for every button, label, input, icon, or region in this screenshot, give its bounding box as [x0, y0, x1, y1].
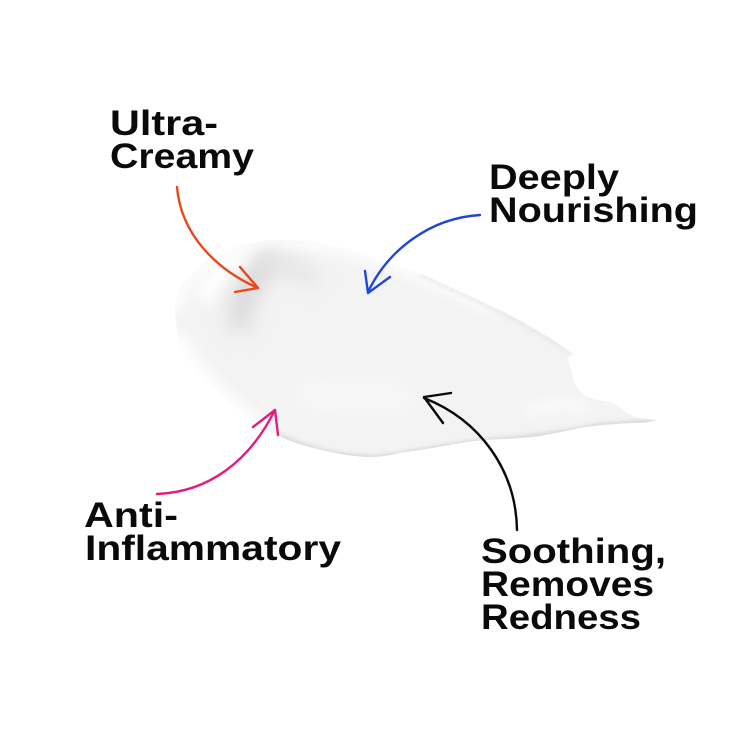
arrow: pink: [157, 410, 278, 494]
cream swatch: [175, 240, 657, 458]
arrow: black: [424, 393, 517, 530]
label: Anti-Inflammatory: Inflammatory: [85, 529, 342, 568]
label: Deeply Nourishing: [489, 158, 698, 230]
label: Soothing, Removes Redness: Removes: [481, 565, 654, 604]
label: Soothing, Removes Redness: Soothing,: [481, 532, 666, 571]
label: Ultra-Creamy: Ultra-: [110, 104, 218, 143]
arrow: blue: [365, 215, 480, 293]
label: Ultra-Creamy: [110, 104, 255, 176]
label: Ultra-Creamy: Creamy: [110, 137, 255, 176]
label: Deeply Nourishing: Deeply: [489, 158, 620, 197]
arrow: orange: [177, 187, 258, 292]
label: Soothing, Removes Redness: [481, 532, 666, 637]
label: Anti-Inflammatory: [84, 496, 342, 568]
label: Deeply Nourishing: Nourishing: [489, 191, 698, 230]
label: Soothing, Removes Redness: Redness: [481, 598, 641, 637]
infographic canvas: [85, 110, 696, 630]
label: Anti-Inflammatory: Anti-: [84, 496, 178, 535]
